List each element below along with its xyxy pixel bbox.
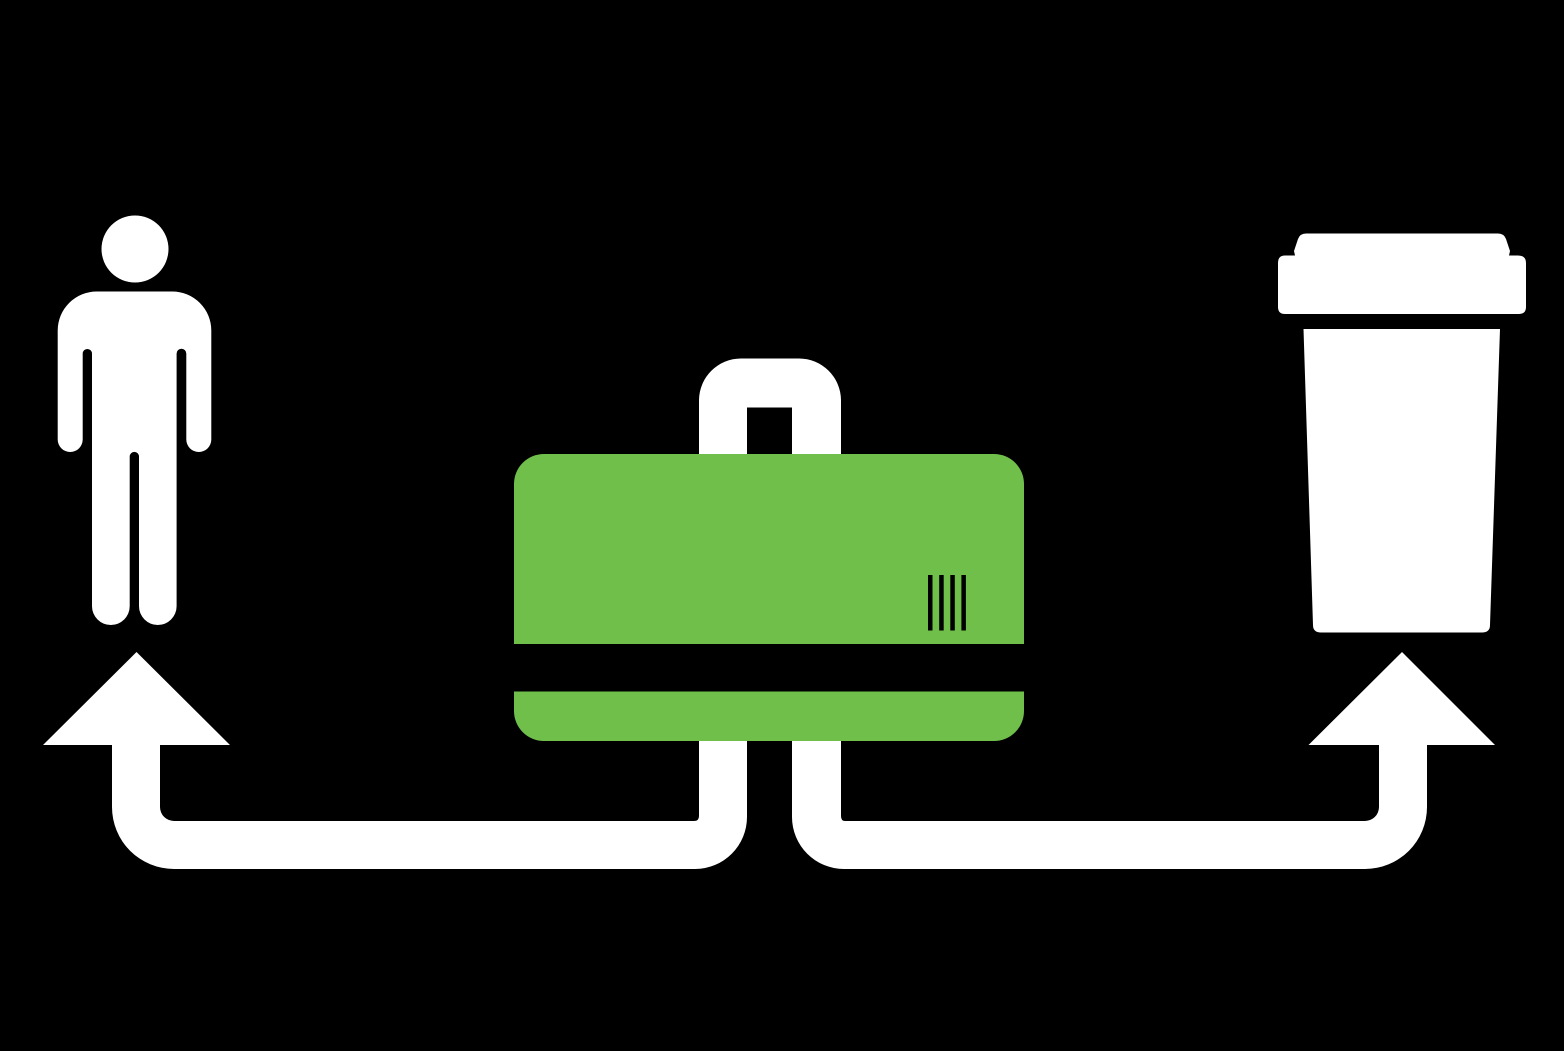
arrow: card to person [43, 652, 747, 869]
card handle [699, 358, 841, 460]
card body [514, 454, 1024, 741]
icon: coffee cup [1278, 234, 1526, 632]
icon: person [58, 216, 211, 625]
icon: credit card with handle [513, 358, 1025, 741]
cup lid [1278, 234, 1526, 314]
cup body [1304, 329, 1500, 632]
magnetic stripe [513, 644, 1025, 692]
arrow: card to coffee cup [792, 652, 1495, 869]
barcode [928, 575, 966, 630]
